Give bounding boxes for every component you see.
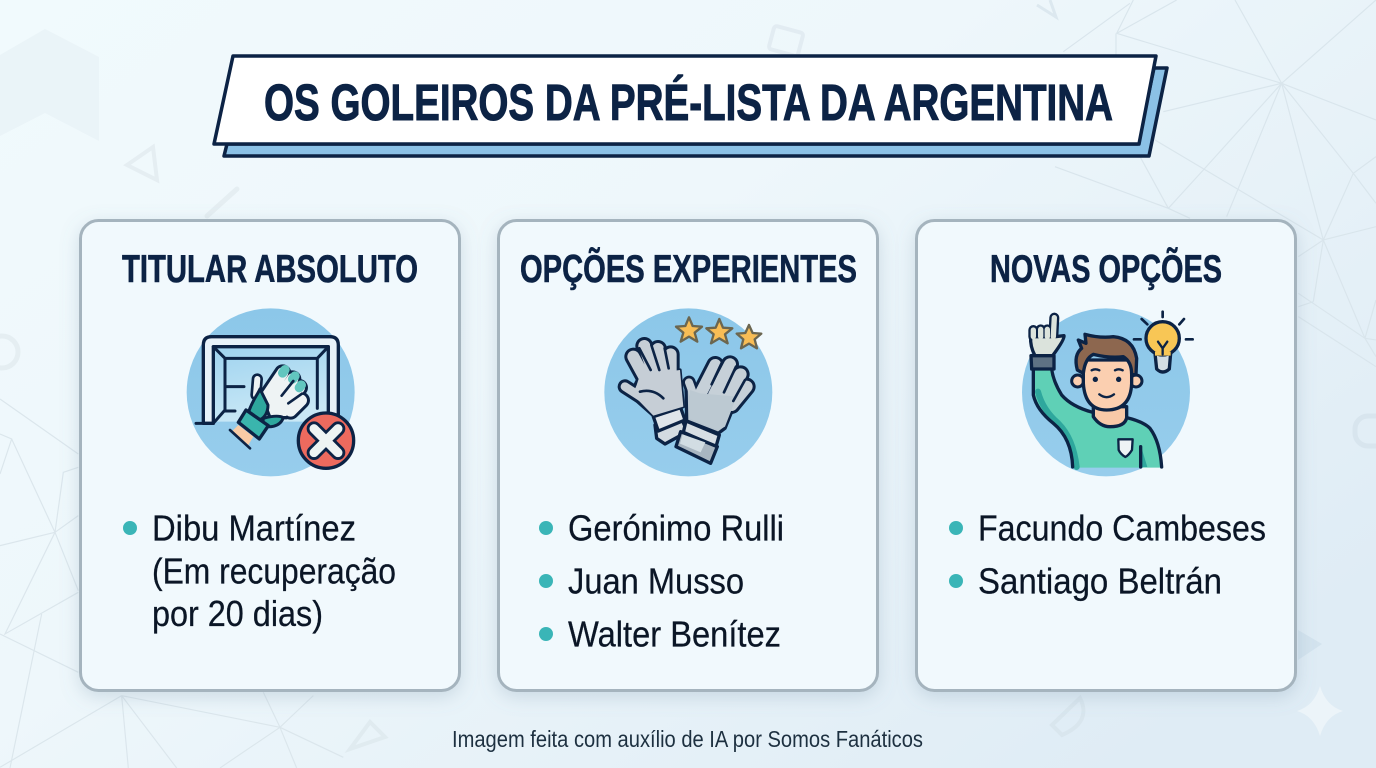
bullet list: Santiago Beltrán — [978, 560, 1222, 602]
panel: novas opções — [916, 220, 1296, 690]
bullet list — [123, 508, 396, 634]
banner plate — [214, 56, 1156, 144]
title banner — [214, 56, 1167, 156]
banner shadow layer — [224, 68, 1167, 156]
bullet list — [539, 508, 784, 654]
card background — [80, 220, 460, 690]
bullet list: Walter Benítez — [568, 614, 781, 654]
bullet list: (Em recuperação — [152, 550, 396, 592]
icon: young goalkeeper with light bulb — [1022, 308, 1193, 476]
card background — [916, 220, 1296, 690]
bullet list: Juan Musso — [568, 560, 744, 602]
bullet list: Gerónimo Rulli — [568, 508, 784, 548]
footer credit: Imagem feita com auxílio de IA por Somos Fanáticos — [452, 726, 923, 752]
icon: goal, glove and red cross — [187, 308, 355, 476]
heading: titular absoluto: TITULAR ABSOLUTO — [122, 248, 418, 291]
heading: novas opções: NOVAS OPÇÕES — [990, 247, 1222, 291]
card background — [498, 220, 878, 690]
icon: gloves and three stars — [604, 308, 772, 476]
panel: titular absoluto — [80, 220, 460, 690]
panel: opções experientes — [498, 220, 878, 690]
bullet list: Facundo Cambeses — [978, 508, 1266, 548]
bullet list — [949, 508, 1266, 602]
title text: OS GOLEIROS DA PRÉ-LISTA DA ARGENTINA — [264, 74, 1113, 131]
bullet list: Dibu Martínez — [152, 508, 356, 548]
bullet list: por 20 dias) — [152, 593, 323, 634]
heading: opções experientes: OPÇÕES EXPERIENTES — [520, 247, 857, 291]
